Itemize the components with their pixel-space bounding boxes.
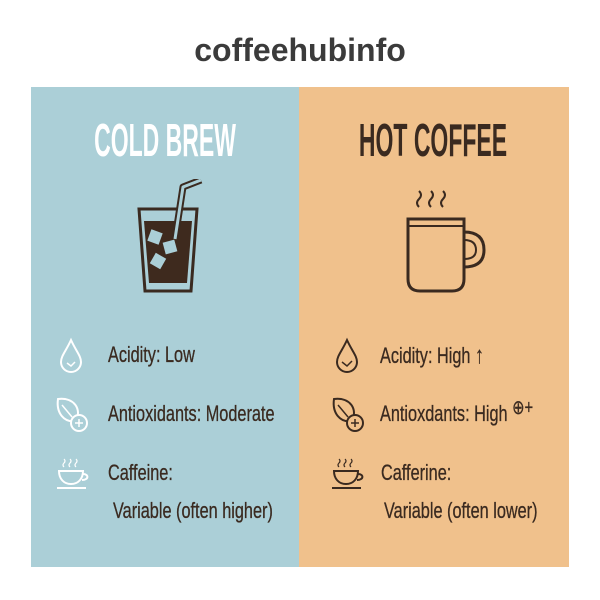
heading: cold brew: COLD BREW	[94, 114, 236, 166]
icon: leaf plus	[56, 398, 88, 432]
text: antioxidants moderate: Antioxidants: Moderate	[108, 401, 275, 426]
text: acidity low: Acidity: Low	[108, 342, 195, 367]
item: acidity	[60, 338, 195, 373]
icon: leaf plus	[332, 398, 364, 432]
item: acidity	[336, 338, 484, 373]
item: antioxidants	[332, 397, 533, 432]
text: cafferine: Cafferine:	[381, 460, 451, 485]
title: coffeehubinfo	[194, 32, 406, 68]
icon: cup	[57, 458, 88, 489]
icon: mug	[406, 190, 486, 292]
icon: drop	[60, 338, 82, 373]
icon: cup	[332, 458, 364, 489]
panel: cold brew	[31, 87, 299, 567]
panel: hot coffee	[299, 87, 569, 567]
icon: iced glass	[137, 179, 202, 292]
item: caffeine	[57, 458, 273, 523]
item: caffeine	[332, 458, 538, 523]
item: antioxidants	[56, 398, 275, 432]
heading: hot coffee: HOT COFFEE	[359, 114, 507, 166]
text: antioxidants high: Antioxdants: High ⊕+	[380, 397, 533, 426]
icon: drop	[336, 338, 358, 373]
text: acidity high: Acidity: High ↑	[380, 342, 484, 369]
text: caffeine: Caffeine:	[108, 460, 173, 485]
text: variable higher: Variable (often higher)	[113, 498, 273, 523]
text: variable lower: Variable (often lower)	[384, 498, 538, 523]
